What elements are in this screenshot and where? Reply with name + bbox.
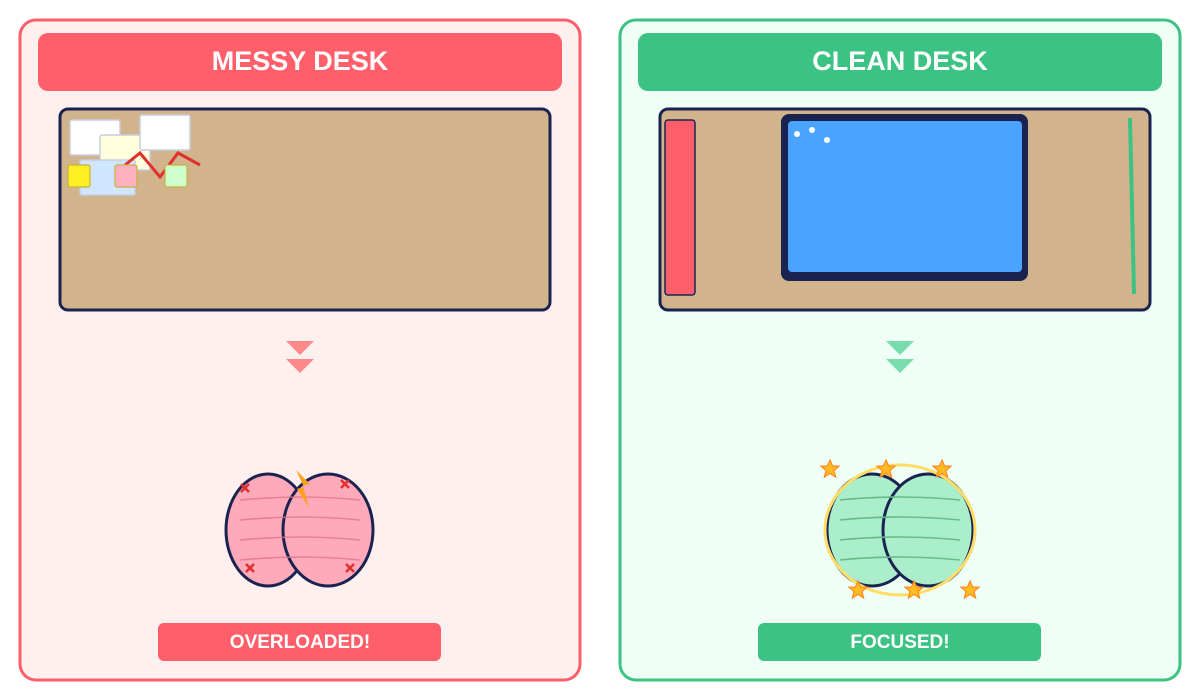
heading: clean desk: CLEAN DESK	[812, 46, 988, 76]
panel: clean desk	[620, 20, 1180, 680]
heading: clean desk	[638, 33, 1162, 91]
label: focused	[758, 623, 1041, 661]
arrow: down	[286, 341, 314, 373]
label: overloaded	[158, 623, 441, 661]
panel: messy desk	[20, 20, 580, 680]
arrow: down	[886, 341, 914, 373]
icon: focused brain	[821, 460, 979, 598]
heading: messy desk	[38, 33, 562, 91]
messy desk surface	[60, 109, 550, 310]
clean desk surface	[660, 109, 1150, 310]
label: overloaded: OVERLOADED!	[230, 632, 370, 653]
icon: overloaded brain	[226, 470, 373, 586]
heading: messy desk: MESSY DESK	[212, 46, 389, 76]
label: focused: FOCUSED!	[850, 632, 950, 653]
